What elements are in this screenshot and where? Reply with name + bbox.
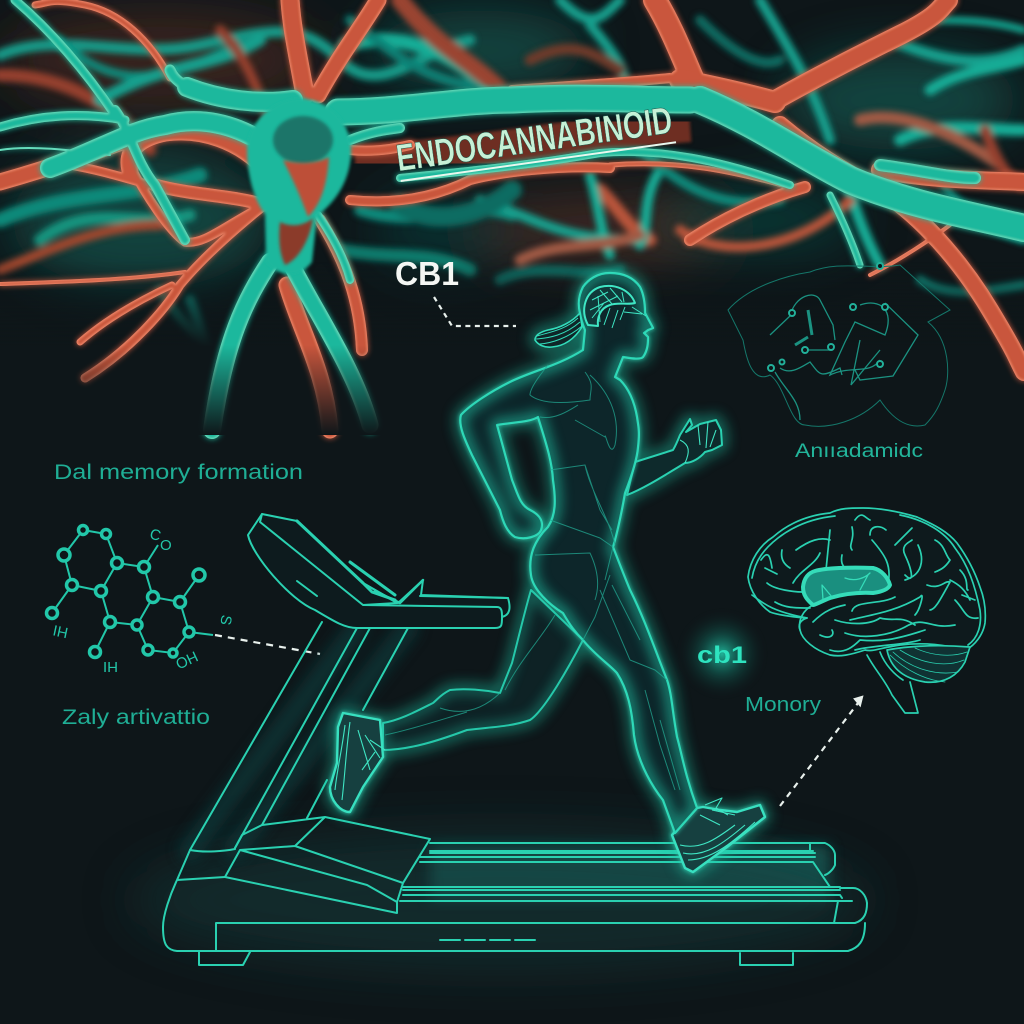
dim background network [0,0,1024,420]
cerebrum outline [748,508,985,656]
runner glow halo [330,273,765,872]
inner rim light [460,273,697,833]
hippocampus [803,568,890,605]
label: anandamide: Anııadamidc [795,441,923,462]
cerebellum [887,646,970,682]
molecule labels: S [216,614,235,626]
back leg rim light [383,590,583,750]
band behind title [355,125,690,160]
shoe details [335,722,755,860]
console [248,514,510,628]
arrow: to brain [780,697,862,806]
belt [400,843,852,923]
fade of distant network [0,262,1024,347]
cell body [247,98,351,274]
molecule labels: HO [173,647,200,672]
molecule labels: O [160,537,172,554]
torso and front leg [460,273,697,833]
label: endocannabinoid [394,100,676,181]
icon: molecule [46,526,213,658]
feet [199,952,793,965]
right side dendrites [512,78,670,90]
dashed connector: molecule to treadmill [215,635,320,654]
molecule labels: HI [51,621,70,641]
teal dendrites [0,0,1024,430]
icon: brain [748,508,985,713]
muscle lines [385,365,680,790]
finger lines [680,422,716,463]
molecule labels [51,526,235,675]
colour wash [0,10,1020,290]
temporal lobe [800,596,955,651]
molecule labels: C [148,526,163,545]
label: memory formation: Dal memory formation [54,460,303,484]
label: cb1 lower [676,608,768,700]
label: endocannabinoid: ENDOCANNABINOID [394,100,675,180]
runner [330,273,765,872]
label: cb1 lower: cb1 [697,642,747,669]
back leg [383,590,583,750]
label: CB1: CB1 [395,255,459,292]
orange dendrites [0,0,1024,430]
shoes [330,713,765,872]
treadmill glow [430,845,830,900]
treadmill [130,514,870,970]
molecule labels: HI [103,658,118,675]
front arm [627,419,722,495]
bottom fade of dendrites [0,345,480,435]
ponytail [535,313,582,347]
uprights [190,622,408,850]
brain in head [584,286,646,328]
label: memory: Monory [745,694,821,716]
sulci [761,515,978,618]
label: activation: Zaly artivattio [62,706,210,729]
base [163,849,867,951]
label: CB1 [395,255,516,326]
panel: neuron network [0,0,1024,456]
circuit map [728,263,950,426]
brainstem [867,652,918,713]
motor cover [225,817,430,913]
